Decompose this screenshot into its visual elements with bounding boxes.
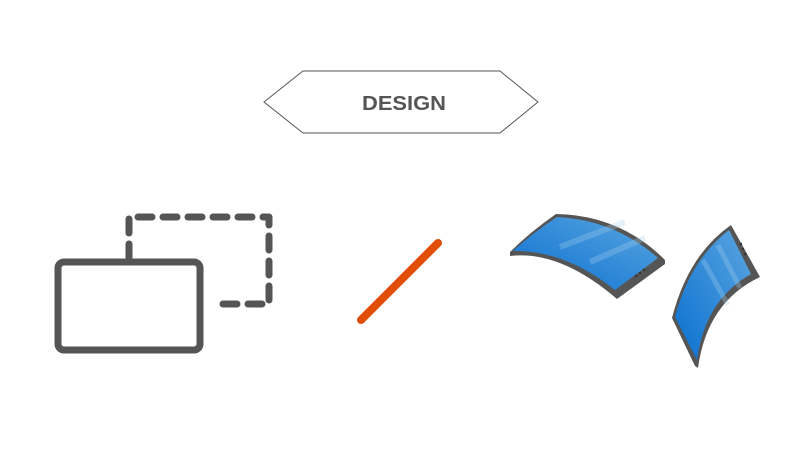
icon: orange line [361,243,438,320]
icon: resize window [58,217,269,350]
icon: curved screen 1 [510,214,665,299]
title: DESIGN hexagon banner: DESIGN [362,93,446,115]
icon: curved screen 2 [672,225,760,368]
title: DESIGN hexagon banner [264,71,538,133]
